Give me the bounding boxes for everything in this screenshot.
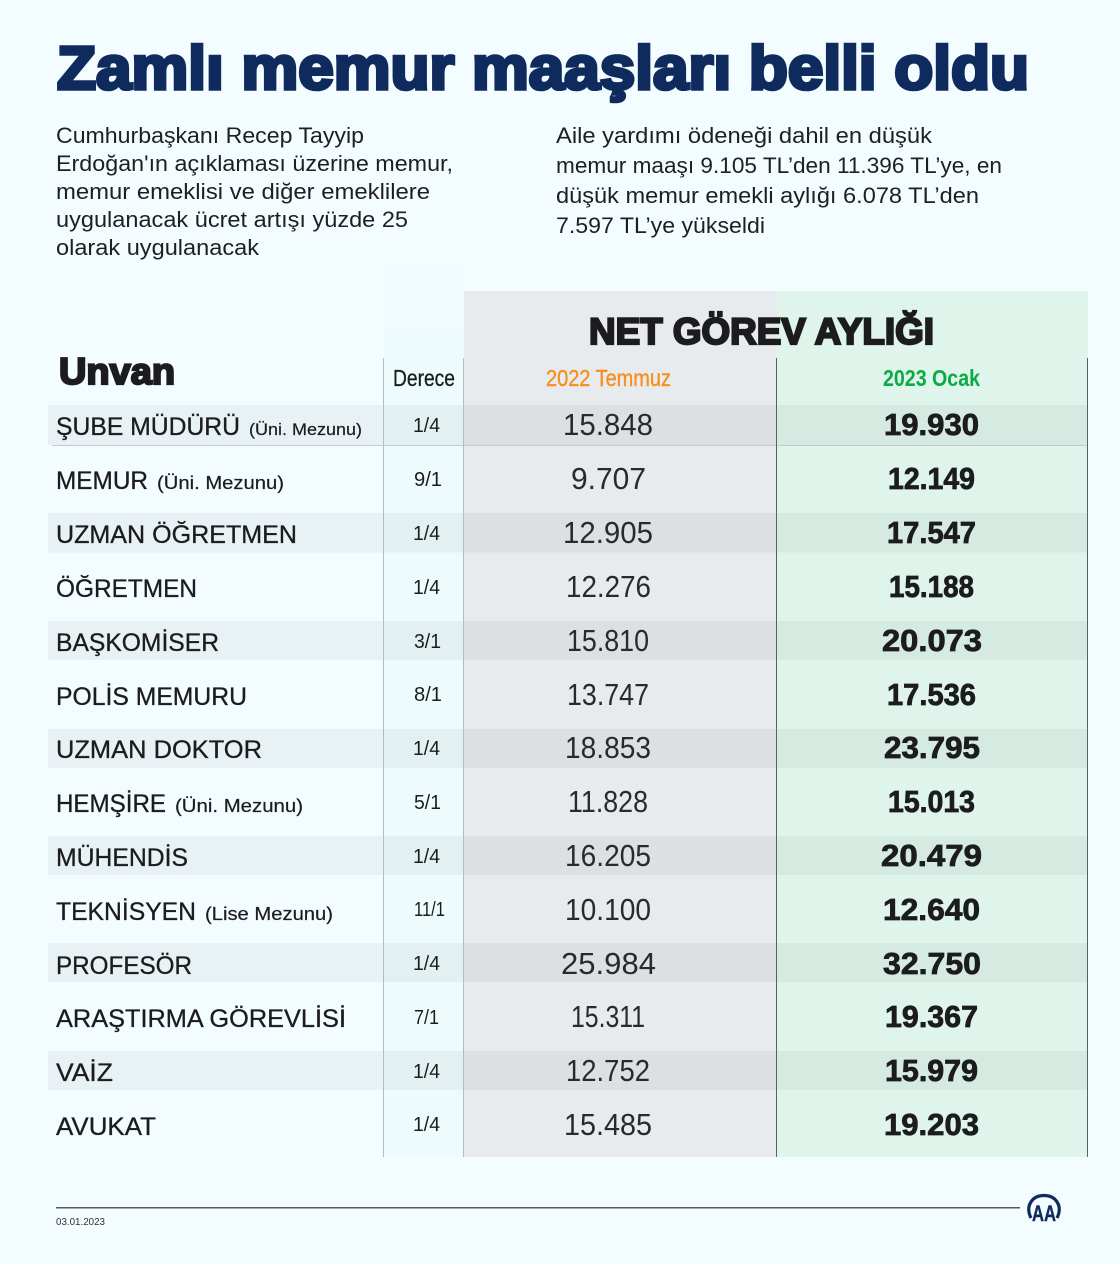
text block: left intro: Erdoğan'ın açıklaması üzerine memur, bbox=[56, 151, 453, 176]
text block: left intro bbox=[56, 123, 453, 260]
row: hemşire: (Üni. Mezunu) bbox=[175, 796, 303, 816]
row: şube müdürü: 19.930 bbox=[884, 407, 979, 442]
row: mühendis: MÜHENDİS bbox=[56, 843, 188, 872]
column band: 2022 Temmuz bbox=[464, 291, 777, 1157]
icon: AA logo: AA bbox=[1032, 1201, 1056, 1226]
row: polis memuru: 13.747 bbox=[567, 677, 649, 712]
heading: 2022 temmuz: 2022 Temmuz bbox=[546, 365, 671, 391]
row: başkomiser: BAŞKOMİSER bbox=[56, 628, 219, 657]
row: memur: (Üni. Mezunu) bbox=[157, 473, 284, 493]
row: uzman doktor: UZMAN DOKTOR bbox=[56, 736, 262, 764]
text block: right intro: memur maaşı 9.105 TL’den 11.396 TL’ye, en bbox=[556, 153, 1002, 178]
row: uzman doktor: 1/4 bbox=[413, 738, 440, 760]
row: hemşire: 15.013 bbox=[888, 784, 975, 819]
row: teknisyen: 11/1 bbox=[414, 899, 445, 921]
row: mühendis bbox=[56, 838, 982, 873]
row: araştırma görevlisi: 15.311 bbox=[571, 999, 645, 1034]
row: hemşire: 11.828 bbox=[568, 784, 648, 819]
row: şube müdürü: 15.848 bbox=[563, 407, 653, 442]
row: başkomiser: 20.073 bbox=[882, 623, 982, 658]
row: uzman öğretmen: 17.547 bbox=[887, 515, 976, 550]
row: avukat: 19.203 bbox=[884, 1107, 979, 1142]
text block: right intro: 7.597 TL’ye yükseldi bbox=[556, 213, 765, 238]
row: mühendis: 20.479 bbox=[881, 838, 982, 873]
heading: unvan: Unvan bbox=[59, 351, 175, 392]
heading: net görev aylığı: NET GÖREV AYLIĞI bbox=[589, 311, 934, 352]
row: memur bbox=[56, 461, 975, 496]
row: profesör: 25.984 bbox=[561, 946, 656, 981]
row: profesör: 1/4 bbox=[413, 953, 440, 975]
row: uzman öğretmen: 12.905 bbox=[563, 515, 653, 550]
row: öğretmen bbox=[56, 569, 974, 604]
panel: salary table bbox=[48, 255, 1088, 1157]
row: uzman öğretmen bbox=[56, 515, 976, 550]
row: mühendis: 16.205 bbox=[565, 838, 651, 873]
row: hemşire: 5/1 bbox=[414, 792, 441, 814]
row: teknisyen: 12.640 bbox=[883, 892, 980, 927]
row: araştırma görevlisi: 19.367 bbox=[885, 999, 978, 1034]
title: Zamlı memur maaşları belli oldu bbox=[57, 34, 1029, 102]
column band: 2023 Ocak bbox=[777, 291, 1088, 1157]
row: memur: 12.149 bbox=[888, 461, 975, 496]
heading: derece: Derece bbox=[393, 365, 455, 391]
row: memur: 9.707 bbox=[571, 461, 646, 496]
row: avukat: 1/4 bbox=[413, 1114, 440, 1136]
row: memur: MEMUR bbox=[56, 467, 148, 495]
row: hemşire: HEMŞİRE bbox=[56, 789, 166, 818]
row: öğretmen: 15.188 bbox=[889, 569, 974, 604]
row: polis memuru: 8/1 bbox=[414, 684, 442, 706]
column band: derece bbox=[384, 255, 464, 1157]
row: polis memuru: POLİS MEMURU bbox=[56, 682, 247, 711]
row: avukat bbox=[56, 1107, 979, 1142]
row: profesör: 32.750 bbox=[883, 946, 981, 981]
row: profesör bbox=[56, 946, 981, 981]
text block: left intro: Cumhurbaşkanı Recep Tayyip bbox=[56, 123, 364, 148]
row: uzman öğretmen: 1/4 bbox=[413, 523, 440, 545]
row: şube müdürü bbox=[56, 407, 979, 442]
row: teknisyen bbox=[56, 892, 980, 927]
row: mühendis: 1/4 bbox=[413, 846, 440, 868]
row: vaiz bbox=[56, 1053, 978, 1088]
row: profesör: PROFESÖR bbox=[56, 952, 192, 980]
text block: right intro bbox=[556, 123, 1002, 238]
row: memur: 9/1 bbox=[414, 469, 442, 491]
row: şube müdürü: (Üni. Mezunu) bbox=[249, 420, 362, 439]
text block: left intro: memur emeklisi ve diğer emeklilere bbox=[56, 179, 430, 204]
row: başkomiser: 3/1 bbox=[414, 631, 441, 653]
row: polis memuru bbox=[56, 677, 976, 712]
row: hemşire bbox=[56, 784, 975, 819]
row: uzman doktor bbox=[56, 730, 980, 765]
text block: left intro: olarak uygulanacak bbox=[56, 235, 260, 260]
row: öğretmen: ÖĞRETMEN bbox=[56, 574, 197, 603]
row: uzman doktor: 18.853 bbox=[565, 730, 651, 765]
row: araştırma görevlisi: 7/1 bbox=[414, 1007, 439, 1029]
row: teknisyen: 10.100 bbox=[565, 892, 651, 927]
row: öğretmen: 1/4 bbox=[413, 577, 440, 599]
row: araştırma görevlisi: ARAŞTIRMA GÖREVLİSİ bbox=[56, 1004, 346, 1033]
row: öğretmen: 12.276 bbox=[566, 569, 651, 604]
row: vaiz: 15.979 bbox=[885, 1053, 978, 1088]
icon: AA logo bbox=[1029, 1196, 1059, 1226]
row: araştırma görevlisi bbox=[56, 999, 978, 1034]
row: şube müdürü: 1/4 bbox=[413, 415, 440, 437]
date: 03.01.2023 bbox=[56, 1217, 105, 1228]
row: polis memuru: 17.536 bbox=[887, 677, 976, 712]
row: vaiz: VAİZ bbox=[56, 1058, 113, 1087]
row: şube müdürü: ŞUBE MÜDÜRÜ bbox=[56, 413, 240, 441]
row: uzman doktor: 23.795 bbox=[884, 730, 980, 765]
row: avukat: 15.485 bbox=[564, 1107, 652, 1142]
row: başkomiser bbox=[56, 623, 982, 658]
heading: 2023 ocak: 2023 Ocak bbox=[883, 365, 980, 391]
text block: right intro: düşük memur emekli aylığı 6.078 TL’den bbox=[556, 183, 979, 208]
row: avukat: AVUKAT bbox=[56, 1113, 156, 1141]
row: teknisyen: (Lise Mezunu) bbox=[205, 904, 333, 924]
text block: left intro: uygulanacak ücret artışı yüzde 25 bbox=[56, 207, 408, 232]
row stripes bbox=[48, 405, 1088, 1090]
row: başkomiser: 15.810 bbox=[567, 623, 649, 658]
row: vaiz: 12.752 bbox=[566, 1053, 650, 1088]
row: uzman öğretmen: UZMAN ÖĞRETMEN bbox=[56, 520, 297, 549]
text block: right intro: Aile yardımı ödeneği dahil en düşük bbox=[556, 123, 933, 148]
row: teknisyen: TEKNİSYEN bbox=[56, 897, 196, 926]
row: vaiz: 1/4 bbox=[413, 1061, 440, 1083]
